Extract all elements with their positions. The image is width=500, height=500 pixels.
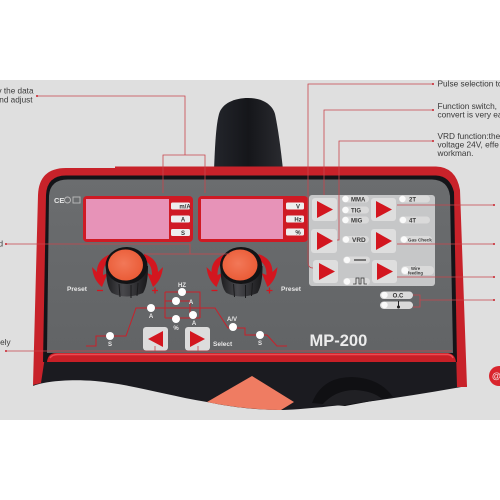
bottom red strip [47,353,456,362]
compliance marks: CE [54,196,64,205]
function control block: 2T [409,198,416,204]
parameter curve diagram: A [149,314,154,320]
left annotation text [0,86,34,347]
right annotation text: voltage 24V, effe [438,140,499,150]
left annotation text: nd adjust [0,95,33,104]
rear socket [312,377,393,406]
right display: % [295,230,301,236]
select buttons: Select [213,341,233,348]
function control block [309,195,435,286]
right preset knob: Preset [281,286,302,293]
parameter curve diagram: HZ [178,283,186,289]
parameter curve diagram: A [192,321,197,327]
right display: Hz [294,218,302,224]
function control block: MIG [351,218,363,224]
function control block: 4T [409,218,416,224]
select buttons [143,327,233,350]
right annotation text [436,79,500,158]
function control block: Wire [411,266,421,271]
left display: S [181,231,185,237]
compliance marks [54,196,80,205]
function control block: VRD [352,237,366,244]
right preset knob [206,247,302,298]
red circle badge [489,366,500,386]
left display: m/A [179,204,191,210]
model name: MP-200 [310,332,367,350]
function control block: TIG [351,208,361,214]
right annotation text: workman. [436,148,473,158]
parameter curve diagram: % [173,326,179,332]
parameter curve diagram: A/V [227,317,237,323]
parameter curve diagram: S [258,341,262,347]
left preset knob [67,247,163,298]
O.C and temperature indicators [380,292,413,309]
welder handle [214,98,283,170]
O.C and temperature indicators: O.C [393,294,404,300]
function control block: Gas Check [408,238,432,242]
parameter curve diagram [86,283,287,348]
left display [83,196,193,242]
right display: V [296,204,300,210]
left display: A [181,218,186,224]
function control block: feeding [408,270,423,276]
right display [198,196,308,242]
welder body [33,166,467,410]
function control block: MMA [351,198,366,204]
parameter curve diagram: S [108,342,112,348]
leader lines [7,84,494,351]
parameter curve diagram: A [189,300,194,306]
leader dots [5,83,495,352]
right annotation text: Function switch, [438,101,497,111]
right annotation text: VRD function:the [438,131,500,141]
left preset knob: Preset [67,286,88,293]
salmon diamond [207,376,294,410]
left annotation text: ely [0,338,12,347]
